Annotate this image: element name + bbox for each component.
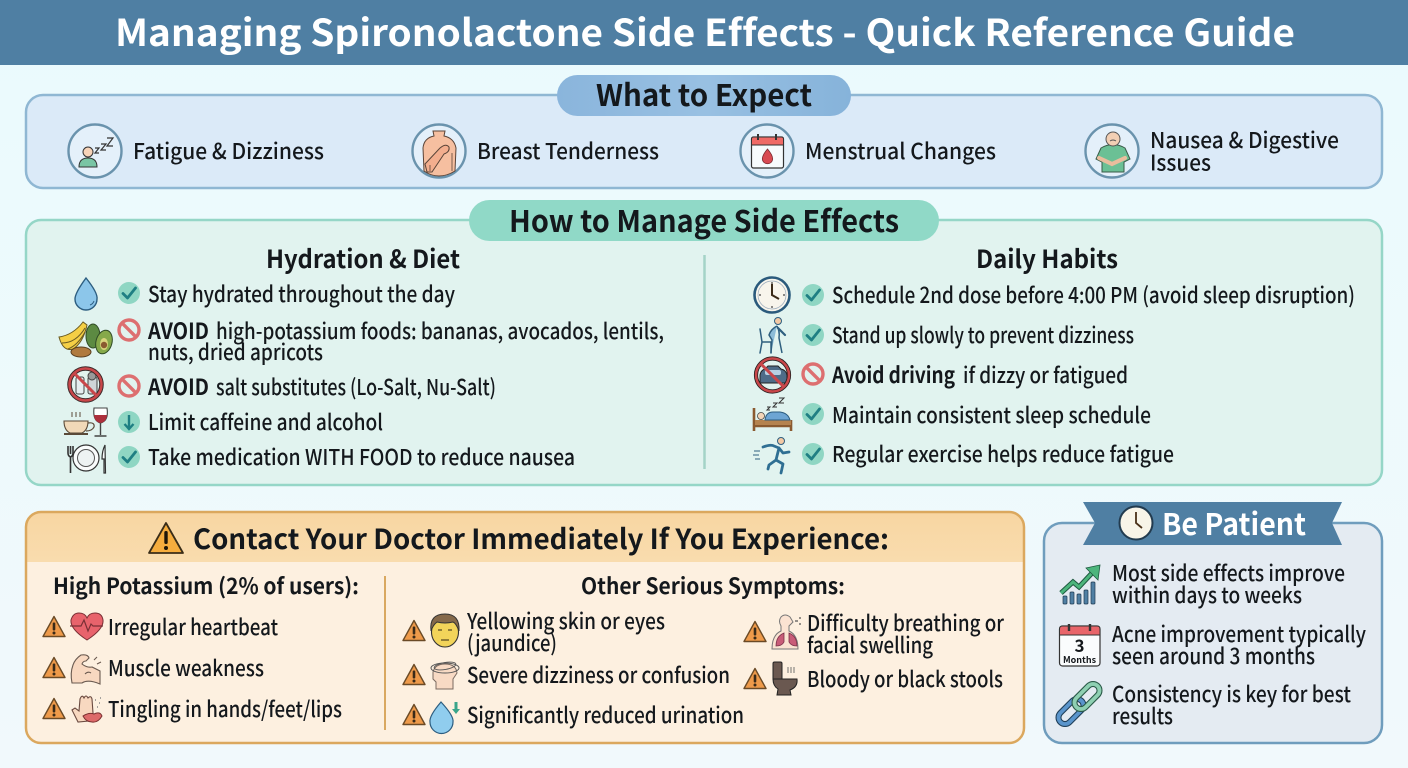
label: nausea: Nausea & Digestive: [1150, 123, 1339, 155]
check: [802, 403, 824, 425]
column: other serious symptoms: [403, 569, 1005, 734]
text: acne: seen around 3 months: [1112, 639, 1315, 671]
text: jaundice: Yellowing skin or eyes: [466, 604, 665, 636]
heading pill: how to manage: How to Manage Side Effects: [509, 197, 899, 241]
icon: yellow face: [431, 614, 459, 647]
icon: coffee and wine: [64, 408, 107, 436]
icon: dizzy head: [431, 661, 459, 689]
header band: [27, 513, 1023, 562]
icon: no salt: [70, 368, 102, 400]
icon: toilet: [773, 662, 797, 695]
text: avoid driving: [831, 358, 1128, 390]
warning: [403, 620, 425, 640]
icon: warning: [149, 523, 183, 553]
warning: [43, 698, 65, 718]
text: urination: Significantly reduced urination: [467, 698, 744, 730]
icon: improving chart: [1061, 565, 1100, 604]
text: hydrated: Stay hydrated throughout the day: [148, 277, 455, 309]
check: [118, 446, 140, 468]
text: avoid salt: [147, 370, 496, 402]
text: avoid salt: salt substitutes (Lo-Salt, Nu-Salt): [216, 370, 496, 402]
title banner: [0, 0, 1408, 65]
text: exercise: Regular exercise helps reduce fatigue: [832, 437, 1174, 469]
panel: contact your doctor: [26, 512, 1024, 743]
subheading: daily habits: Daily Habits: [976, 240, 1118, 276]
icon: breast tenderness: [412, 124, 466, 178]
panel: what to expect: [26, 71, 1382, 188]
text: improve: Most side effects improve: [1112, 556, 1345, 588]
warning: [744, 668, 766, 688]
panel: how to manage side effects: [26, 197, 1382, 485]
label: fatigue: Fatigue & Dizziness: [133, 134, 324, 166]
icon: muscle: [71, 655, 101, 684]
icon: reduced urination: [430, 702, 460, 734]
text: jaundice: (jaundice): [467, 626, 557, 658]
heading pill: what to expect: What to Expect: [596, 71, 812, 115]
text: breathing: Difficulty breathing or: [807, 606, 1005, 638]
icon: water drop: [75, 278, 97, 310]
check: [802, 284, 824, 306]
icon: plate and cutlery: [68, 445, 106, 473]
text: consistency: [1112, 677, 1351, 731]
title banner: Managing Spironolactone Side Effects - Quick Reference Guide: [115, 3, 1295, 57]
text: acne: Acne improvement typically: [1112, 617, 1366, 649]
subheading: high potassium: High Potassium (2% of users):: [53, 569, 359, 601]
column: daily habits: [753, 240, 1355, 473]
icon: 3 months calendar: Months: [1063, 653, 1097, 666]
text: avoid potassium: [147, 314, 664, 367]
text: consistency: results: [1112, 699, 1173, 731]
panel: be patient: [1044, 500, 1382, 743]
icon: lungs: [772, 615, 801, 649]
warning: [403, 704, 425, 724]
warning: [744, 622, 766, 642]
column: hydration and diet: [59, 240, 664, 473]
label: nausea: Issues: [1150, 145, 1211, 177]
warning: [43, 658, 65, 678]
icon: clock: [754, 278, 790, 312]
icon: clock: [1120, 506, 1152, 540]
text: limit caffeine: Limit caffeine and alcohol: [148, 405, 383, 437]
text: stools: Bloody or black stools: [807, 662, 1003, 694]
icon: 3 months calendar: 3: [1074, 632, 1085, 657]
warning: [43, 616, 65, 636]
text: breathing: [807, 606, 1005, 660]
icon: bed: [754, 398, 791, 431]
icon: 3 months calendar: [1060, 624, 1100, 666]
ribbon heading: Be Patient: [1162, 500, 1306, 544]
icon: fatigue: [68, 124, 122, 178]
icon: menstrual calendar: [740, 124, 794, 178]
icon: heart: [70, 613, 103, 640]
text: consistency: Consistency is key for best: [1112, 677, 1351, 709]
text: jaundice: [466, 604, 665, 658]
check: [802, 324, 824, 346]
subheading: other symptoms: Other Serious Symptoms:: [581, 569, 845, 601]
arrow: limit: [118, 411, 140, 433]
check: [118, 282, 140, 304]
text: avoid potassium: AVOID: [147, 314, 209, 346]
text: tingling: Tingling in hands/feet/lips: [108, 692, 342, 724]
icon: high potassium foods: [59, 322, 115, 357]
text: improve: [1112, 556, 1345, 610]
prohibition: [803, 364, 823, 384]
text: improve: within days to weeks: [1112, 578, 1302, 610]
prohibition: [119, 320, 139, 340]
text: acne: [1112, 617, 1366, 671]
icon: nausea: [1086, 124, 1138, 178]
text: severe dizziness: Severe dizziness or confusion: [467, 658, 730, 690]
subheading: hydration: Hydration & Diet: [266, 240, 460, 276]
icon: no driving: [756, 358, 789, 392]
text: avoid salt: AVOID: [147, 370, 209, 402]
label: breast tenderness: Breast Tenderness: [477, 134, 659, 166]
label: menstrual changes: Menstrual Changes: [805, 134, 996, 166]
label: nausea: [1150, 123, 1339, 177]
text: avoid potassium: high-potassium foods: bananas, avocados, lentils,: [216, 314, 664, 346]
text: avoid driving: Avoid driving: [831, 358, 955, 390]
heading: contact doctor: Contact Your Doctor Immediately If You Experience:: [193, 518, 889, 558]
text: avoid potassium: nuts, dried apricots: [148, 335, 323, 367]
prohibition: [119, 376, 139, 396]
text: breathing: facial swelling: [807, 628, 933, 660]
text: sleep: Maintain consistent sleep schedule: [832, 398, 1151, 430]
icon: standing from chair: [760, 318, 785, 353]
icon: chain link: [1056, 681, 1102, 727]
text: stand slowly: Stand up slowly to prevent dizziness: [832, 318, 1134, 350]
text: heartbeat: Irregular heartbeat: [108, 610, 278, 642]
warning: [403, 664, 425, 684]
ribbon heading: [1083, 500, 1342, 545]
icon: hand and lips: [72, 696, 102, 722]
text: avoid driving: if dizzy or fatigued: [963, 358, 1128, 390]
text: muscle: Muscle weakness: [108, 651, 264, 683]
column: high potassium: [43, 569, 359, 724]
check: [802, 443, 824, 465]
icon: runner: [753, 438, 789, 473]
text: with food: Take medication WITH FOOD to reduce nausea: [148, 440, 575, 472]
